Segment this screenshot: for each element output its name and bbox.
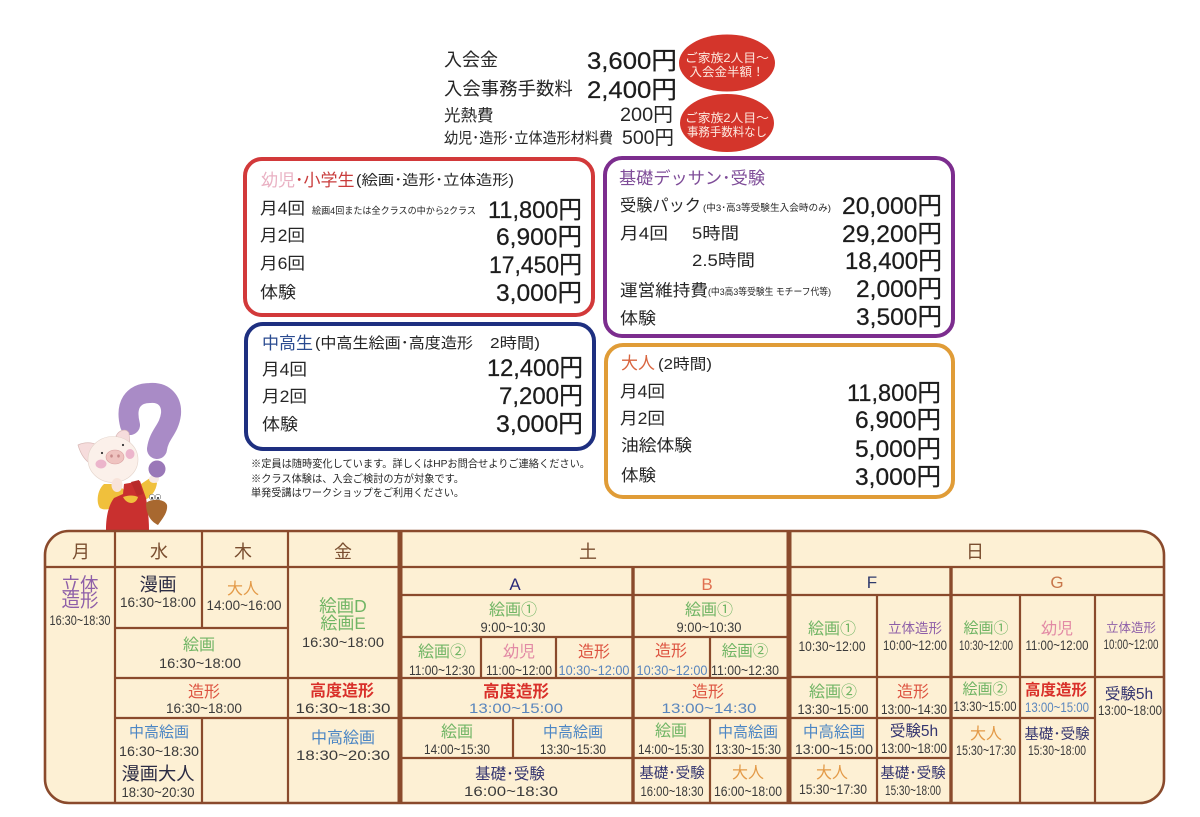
cell: painting D E xyxy=(302,596,384,650)
cell: Saturday B painting 2: 11:00~12:30 xyxy=(711,662,779,678)
cell: painting D E: 絵画E xyxy=(320,614,366,633)
cell: Sunday F junior high painting xyxy=(795,723,873,757)
cell: Sunday F painting 2: 13:30~15:00 xyxy=(798,701,869,717)
panel: basic drawing and exam: 20,000円 xyxy=(842,193,942,220)
cell: Sunday G children: 11:00~12:00 xyxy=(1026,637,1089,653)
fee list xyxy=(444,48,677,149)
cell: Sunday F basic exam xyxy=(880,765,946,798)
panel: children and elementary: 月6回 xyxy=(260,255,305,273)
panel: junior and senior high: 3,000円 xyxy=(496,411,583,438)
cell: Sunday F basic exam: 基礎･受験 xyxy=(880,765,946,782)
cell: Saturday B painting 1: 9:00~10:30 xyxy=(676,619,742,635)
cell: Saturday B basic exam: 基礎･受験 xyxy=(639,765,705,782)
cell: Sunday F sculpture xyxy=(883,621,947,653)
cell: Sunday F junior high painting: 中高絵画 xyxy=(803,723,865,741)
cell: painting D E: 16:30~18:00 xyxy=(302,634,384,650)
panel: children and elementary: 11,800円 xyxy=(488,197,582,224)
cell: Sunday G painting 2 xyxy=(954,681,1017,714)
class group headers: B xyxy=(701,575,713,594)
cell: Saturday A basic exam: 16:00~18:30 xyxy=(464,783,558,799)
cell: Monday: 造形 xyxy=(61,590,99,611)
cell: Sunday G painting 2: 絵画② xyxy=(962,681,1008,698)
cell: Sunday F painting 1: 絵画① xyxy=(808,620,856,638)
fee list: 200円 xyxy=(620,104,673,126)
panel: junior and senior high: 月2回 xyxy=(262,388,307,406)
cell: Sunday G sculpture: 立体造形 xyxy=(1106,621,1156,635)
panel: children and elementary: 体験 xyxy=(260,283,297,302)
panel: basic drawing and exam: 5時間 xyxy=(692,224,739,243)
cell: Sunday G advanced modeling xyxy=(1025,680,1089,715)
cell: Saturday B adult xyxy=(714,764,782,799)
cell: Sunday F sculpture: 10:00~12:00 xyxy=(883,637,947,653)
cell: Sunday G adult: 大人 xyxy=(970,725,1002,743)
cell: Saturday B basic exam: 16:00~18:30 xyxy=(640,783,704,799)
cell: Saturday B painting afternoon xyxy=(638,722,704,757)
cell: Saturday A painting afternoon xyxy=(424,723,490,757)
cell: Sunday F modeling: 造形 xyxy=(897,683,929,701)
cell: Saturday B modeling afternoon xyxy=(662,683,757,716)
cell: Sunday F modeling xyxy=(881,683,947,717)
cell: Sunday F exam 5h: 受験5h xyxy=(890,722,938,740)
cell: Saturday B adult: 16:00~18:00 xyxy=(714,783,782,799)
panel: children and elementary xyxy=(245,159,593,315)
cell: modeling xyxy=(166,683,242,716)
panel: children and elementary: 6,900円 xyxy=(496,224,582,251)
notes: ※クラス体験は、入会ご検討の方が対象です。 xyxy=(251,472,464,485)
cell: painting D E: 絵画D xyxy=(319,596,367,616)
panel: children and elementary: 17,450円 xyxy=(489,252,582,279)
cell: advanced modeling Friday: 16:30~18:30 xyxy=(296,700,391,716)
icon: pig with question mark xyxy=(78,393,171,530)
cell: Sunday F exam 5h xyxy=(881,722,947,756)
hand at chin xyxy=(112,478,122,492)
day headers: 水 xyxy=(150,542,168,562)
cell: Saturday B painting 1: 絵画① xyxy=(685,601,733,619)
panel: junior and senior high: 体験 xyxy=(262,415,299,434)
panel: basic drawing and exam xyxy=(605,158,953,336)
class group headers xyxy=(509,573,1064,594)
cell: Sunday F adult xyxy=(799,764,867,797)
panel: basic drawing and exam: (中3･高3等受験生入会時のみ) xyxy=(703,202,831,214)
cell: Sunday G exam 5h: 13:00~18:00 xyxy=(1098,702,1162,718)
raised hand and dot xyxy=(149,475,159,483)
cell: Sunday G basic exam: 15:30~18:00 xyxy=(1028,742,1086,758)
panel: adults: 5,000円 xyxy=(855,436,941,463)
cell: modeling: 造形 xyxy=(188,683,220,701)
overalls xyxy=(106,481,149,530)
cell: Saturday B modeling afternoon: 造形 xyxy=(692,683,724,701)
cell: Sunday G sculpture: 10:00~12:00 xyxy=(1104,636,1159,652)
panel: junior and senior high xyxy=(246,324,594,449)
panel: basic drawing and exam: (中3高3等受験生 モチーフ代等) xyxy=(708,286,831,298)
cell: Saturday B painting 2 xyxy=(711,642,779,678)
cell: Monday: 16:30~18:30 xyxy=(50,612,111,628)
cell: junior high painting Friday: 18:30~20:30 xyxy=(296,747,390,763)
cell: Sunday G basic exam xyxy=(1024,726,1090,758)
cell: Saturday A junior high painting: 13:30~15:30 xyxy=(540,741,606,757)
panel: basic drawing and exam: 体験 xyxy=(620,309,657,328)
cell: manga xyxy=(120,574,196,610)
callout: entrance fee half price: ご家族2人目〜 xyxy=(685,50,769,65)
cell: Saturday B modeling xyxy=(636,642,708,678)
panel: basic drawing and exam: 受験パック xyxy=(620,196,701,215)
cell: painting: 16:30~18:00 xyxy=(159,655,241,671)
panel: adults: 月2回 xyxy=(620,410,665,428)
panel: adults: (2時間) xyxy=(658,356,712,373)
cell: Saturday A painting 2: 11:00~12:30 xyxy=(409,662,475,678)
day headers: 日 xyxy=(966,542,984,562)
cell: Monday: 立体 xyxy=(61,574,99,595)
fee list: 光熱費 xyxy=(444,106,494,125)
cell: Saturday B painting 2: 絵画② xyxy=(722,642,768,660)
icon: pig xyxy=(78,430,167,530)
callout: entrance fee half price xyxy=(679,34,775,92)
panel: adults: 大人 xyxy=(621,354,655,373)
timetable grid xyxy=(45,531,1164,803)
cell: Saturday A modeling: 10:30~12:00 xyxy=(558,662,630,678)
cell: Sunday F sculpture: 立体造形 xyxy=(888,621,942,636)
fee list: 3,600円 xyxy=(587,48,677,75)
cell: Saturday A advanced modeling: 13:00~15:00 xyxy=(469,700,563,716)
class group headers: G xyxy=(1050,573,1064,592)
cell: Sunday F exam 5h: 13:00~18:00 xyxy=(881,740,947,756)
cell: Saturday A painting 2 xyxy=(409,643,475,678)
cell: Saturday B junior high painting: 中高絵画 xyxy=(718,724,778,741)
cell: adult Thursday xyxy=(206,580,282,613)
cell: Sunday G painting 2: 13:30~15:00 xyxy=(954,698,1017,714)
cell: Saturday A painting afternoon: 14:00~15:30 xyxy=(424,741,490,757)
panel: children and elementary: 月4回 xyxy=(260,200,305,218)
cell: Sunday F adult: 大人 xyxy=(816,764,848,782)
day headers xyxy=(72,542,984,562)
timetable xyxy=(45,531,1164,803)
cell: Sunday G adult xyxy=(956,725,1016,758)
cell: Sunday G adult: 15:30~17:30 xyxy=(956,742,1016,758)
cell: Saturday A modeling: 造形 xyxy=(578,643,610,661)
cell: Saturday B junior high painting xyxy=(715,724,781,757)
callout: no admin fee: 事務手数料なし xyxy=(687,124,767,139)
fee list: 500円 xyxy=(622,127,674,149)
panel: basic drawing and exam: 2.5時間 xyxy=(692,251,755,270)
panel: adults: 油絵体験 xyxy=(621,436,693,455)
panel: children and elementary: 幼児･小学生 xyxy=(261,171,354,190)
cell: Sunday G painting 1 xyxy=(959,620,1013,653)
cell: Sunday G exam 5h xyxy=(1098,685,1162,718)
class group headers: A xyxy=(509,575,521,594)
panel: adults: 6,900円 xyxy=(855,407,941,434)
shirt right arm xyxy=(138,478,157,500)
cell: manga: 16:30~18:00 xyxy=(120,594,196,610)
cell: Sunday F painting 1 xyxy=(798,620,866,654)
cell: painting xyxy=(159,636,241,671)
cell: Saturday A children: 11:00~12:00 xyxy=(486,662,552,678)
cell: Sunday G children: 幼児 xyxy=(1041,620,1073,638)
panel: junior and senior high: 月4回 xyxy=(262,361,307,379)
cell: Saturday A basic exam: 基礎･受験 xyxy=(475,765,545,783)
fee list: 幼児･造形･立体造形材料費 xyxy=(444,130,613,147)
callout: no admin fee: ご家族2人目〜 xyxy=(685,110,769,125)
panel: junior and senior high: 12,400円 xyxy=(487,355,583,382)
class group headers: F xyxy=(867,573,877,592)
timetable background xyxy=(45,531,1164,803)
icon: question mark xyxy=(129,393,171,449)
panel: adults xyxy=(606,345,953,497)
panel: basic drawing and exam: 18,400円 xyxy=(845,248,942,275)
cell: Saturday B adult: 大人 xyxy=(732,764,764,782)
cell: Sunday G advanced modeling: 高度造形 xyxy=(1025,680,1087,699)
cell: Sunday G advanced modeling: 13:00~15:00 xyxy=(1025,699,1089,715)
panel: junior and senior high: (中高生絵画･高度造形 xyxy=(315,335,473,352)
cell: junior high painting and manga adult xyxy=(119,724,199,800)
panel: basic drawing and exam: 運営維持費 xyxy=(620,281,708,300)
callout: no admin fee xyxy=(680,94,774,152)
panel: adults: 体験 xyxy=(621,466,657,485)
cell: advanced modeling Friday: 高度造形 xyxy=(310,681,374,700)
cell: Saturday A basic exam xyxy=(464,765,558,799)
cell: Sunday F painting 2 xyxy=(798,683,869,717)
panel: children and elementary: 絵画4回または全クラスの中から2クラス xyxy=(312,205,476,217)
panel: adults: 3,000円 xyxy=(855,464,941,491)
cell: Sunday F painting 1: 10:30~12:00 xyxy=(798,638,866,654)
notes xyxy=(251,457,590,499)
cell: Saturday A advanced modeling xyxy=(469,681,563,716)
panel: junior and senior high: 中高生 xyxy=(262,334,313,353)
cell: Saturday B painting 1 xyxy=(676,601,742,635)
cell: Monday xyxy=(50,574,111,628)
cell: Saturday A painting 1 xyxy=(480,601,546,635)
cell: adult Thursday: 大人 xyxy=(227,580,259,598)
panel: adults: 月4回 xyxy=(620,383,665,401)
cell: manga: 漫画 xyxy=(139,574,177,595)
panel: junior and senior high: 7,200円 xyxy=(499,383,583,410)
cell: Saturday A painting 1: 9:00~10:30 xyxy=(480,619,546,635)
cell: Saturday B modeling: 造形 xyxy=(655,642,687,660)
cell: adult Thursday: 14:00~16:00 xyxy=(206,597,282,613)
day headers: 土 xyxy=(579,542,597,562)
cell: junior high painting and manga adult: 16:30~18:30 xyxy=(119,743,199,759)
notes: 単発受講はワークショップをご利用ください。 xyxy=(251,486,464,499)
panel: adults: 11,800円 xyxy=(847,380,941,407)
fee list: 2,400円 xyxy=(587,77,677,104)
cell: Saturday B basic exam xyxy=(639,765,705,799)
cell: Saturday A children: 幼児 xyxy=(503,643,535,661)
panel: basic drawing and exam: 月4回 xyxy=(620,225,668,243)
cell: Sunday G painting 1: 10:30~12:00 xyxy=(959,637,1013,653)
cell: Saturday A junior high painting: 中高絵画 xyxy=(543,724,603,741)
panel: junior and senior high: 2時間) xyxy=(490,335,540,352)
head xyxy=(88,436,138,482)
cell: Saturday A advanced modeling: 高度造形 xyxy=(483,681,550,701)
fee list: 入会事務手数料 xyxy=(444,78,573,99)
cell: Sunday F basic exam: 15:30~18:00 xyxy=(885,782,941,798)
notes: ※定員は随時変化しています。詳しくはHPお問合せよりご連絡ください。 xyxy=(251,457,590,470)
shirt left arm xyxy=(98,484,126,509)
brush character xyxy=(146,500,167,525)
cell: Sunday G basic exam: 基礎･受験 xyxy=(1024,726,1090,743)
cell: Saturday B modeling: 10:30~12:00 xyxy=(636,662,708,678)
cell: junior high painting and manga adult: 18:30~20:30 xyxy=(122,784,195,800)
panel: children and elementary: 月2回 xyxy=(260,227,305,245)
cell: painting: 絵画 xyxy=(183,636,215,654)
cell: Saturday B modeling afternoon: 13:00~14:30 xyxy=(662,700,757,716)
panel: basic drawing and exam: 2,000円 xyxy=(856,276,942,303)
panel: basic drawing and exam: 基礎デッサン･受験 xyxy=(619,168,765,188)
cell: Saturday A modeling xyxy=(558,643,630,678)
cell: Saturday B painting afternoon: 絵画 xyxy=(655,722,687,740)
cell: junior high painting and manga adult: 中高絵画 xyxy=(129,724,189,741)
panel: basic drawing and exam: 29,200円 xyxy=(842,221,942,248)
day headers: 月 xyxy=(72,542,90,562)
cell: Saturday A junior high painting xyxy=(540,724,606,757)
cell: junior high painting Friday: 中高絵画 xyxy=(311,729,375,747)
cell: Saturday A painting 1: 絵画① xyxy=(489,601,537,619)
cell: Sunday G children xyxy=(1026,620,1089,653)
cell: Saturday A painting 2: 絵画② xyxy=(418,643,466,661)
cell: Sunday G sculpture xyxy=(1104,621,1159,652)
cell: Saturday B junior high painting: 13:30~15:30 xyxy=(715,741,781,757)
cell: junior high painting and manga adult: 漫画大人 xyxy=(121,763,195,784)
day headers: 木 xyxy=(234,542,252,562)
cell: advanced modeling Friday xyxy=(296,681,391,716)
cell: Saturday A painting afternoon: 絵画 xyxy=(441,723,473,741)
cell: Sunday F painting 2: 絵画② xyxy=(809,683,857,701)
cell: junior high painting Friday xyxy=(296,729,390,763)
cell: Saturday A children xyxy=(486,643,552,678)
cell: Sunday F junior high painting: 13:00~15:00 xyxy=(795,741,873,757)
fee list: 入会金 xyxy=(444,50,498,70)
day headers: 金 xyxy=(334,542,352,562)
cell: Sunday F modeling: 13:00~14:30 xyxy=(881,701,947,717)
panel: basic drawing and exam: 3,500円 xyxy=(856,304,942,331)
panel: children and elementary: (絵画･造形･立体造形) xyxy=(356,172,514,189)
cell: Sunday G exam 5h: 受験5h xyxy=(1105,685,1153,703)
cell: Sunday G painting 1: 絵画① xyxy=(963,620,1009,637)
cell: Saturday B painting afternoon: 14:00~15:30 xyxy=(638,741,704,757)
ears xyxy=(78,443,97,464)
callout: entrance fee half price: 入会金半額！ xyxy=(690,65,764,79)
cell: Sunday F adult: 15:30~17:30 xyxy=(799,781,867,797)
cell: modeling: 16:30~18:00 xyxy=(166,700,242,716)
panel: children and elementary: 3,000円 xyxy=(496,280,582,307)
